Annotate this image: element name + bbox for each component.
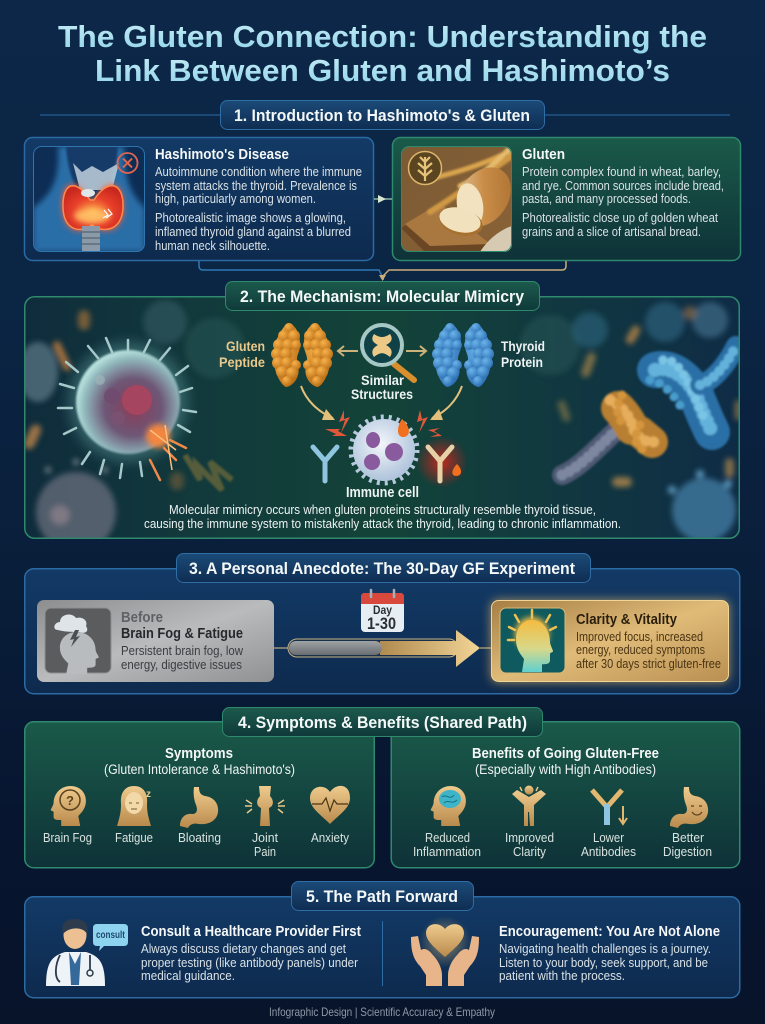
icon: thyroid protein molecule xyxy=(432,323,494,387)
panel: the path forward xyxy=(25,897,740,998)
benefit: lower antibodies xyxy=(581,790,636,859)
symptom: anxiety: Anxiety xyxy=(311,831,350,845)
text: symptoms heading: (Gluten Intolerance & Hashimoto's) xyxy=(104,762,295,777)
text: before description: Brain Fog & Fatigue xyxy=(121,626,243,642)
panel: benefits xyxy=(391,722,740,868)
text: encouragement xyxy=(499,924,720,983)
benefit: improved clarity: Improved xyxy=(505,831,554,845)
text: mimicry description xyxy=(144,502,621,531)
icon: inflamed antibody xyxy=(416,436,468,488)
heading: section 1 xyxy=(220,100,544,130)
benefit: reduced inflammation: Inflammation xyxy=(413,845,481,859)
heading: section 1: 1. Introduction to Hashimoto's & Gluten xyxy=(234,106,530,125)
benefit: reduced inflammation xyxy=(413,786,481,859)
icon: bright head xyxy=(500,608,565,673)
benefit: improved clarity: Clarity xyxy=(513,845,547,859)
text: symptoms heading xyxy=(104,746,295,777)
benefit: lower antibodies: Antibodies xyxy=(581,845,636,859)
text: gluten description: Photorealistic close up of golden wheat xyxy=(522,211,718,225)
text: consult provider: Consult a Healthcare Provider First xyxy=(141,924,361,940)
text: Hashimoto's description: Autoimmune condition where the immune xyxy=(155,165,362,179)
heading: section 2: 2. The Mechanism: Molecular Mimicry xyxy=(240,287,524,306)
label: thyroid protein: Thyroid xyxy=(501,338,545,354)
footer: Infographic Design | Scientific Accuracy & Empathy xyxy=(269,1005,495,1019)
symptom: fatigue: z xyxy=(146,789,151,800)
symptom: brain fog xyxy=(43,786,92,845)
symptom: anxiety xyxy=(310,786,350,845)
icon: immune cell xyxy=(351,417,417,483)
title: Link Between Gluten and Hashimoto’s xyxy=(95,53,670,88)
icon: doctor xyxy=(46,919,128,986)
text: clarity description xyxy=(576,612,721,671)
text: consult provider: medical guidance. xyxy=(141,969,235,983)
text: encouragement: patient with the process. xyxy=(499,969,625,983)
icon: hands holding heart xyxy=(411,916,479,986)
icon: wheat badge xyxy=(408,152,442,184)
benefit: reduced inflammation: Reduced xyxy=(425,831,470,845)
text: before description: Before xyxy=(121,610,163,626)
symptom: brain fog: ? xyxy=(66,793,74,808)
text: encouragement: Encouragement: You Are Not Alone xyxy=(499,924,720,940)
label: similar structures: Structures xyxy=(351,386,413,402)
panel: molecular mimicry xyxy=(18,296,741,552)
icon: warning cross xyxy=(118,153,138,173)
text: symptoms heading: Symptoms xyxy=(165,746,233,762)
text: Hashimoto's description: inflamed thyroid gland against a blurred xyxy=(155,225,351,239)
text: gluten description: Protein complex found in wheat, barley, xyxy=(522,165,721,179)
image: wheat and bread xyxy=(401,146,522,252)
symptom: brain fog: Brain Fog xyxy=(43,831,92,845)
text: clarity description: energy, reduced symptoms xyxy=(576,643,705,657)
label: similar structures: Similar xyxy=(361,372,404,388)
symptom: joint pain xyxy=(245,786,285,859)
heading: section 4 xyxy=(222,708,542,736)
heading: section 2 xyxy=(226,282,540,310)
text: gluten description xyxy=(522,147,724,239)
text: before description: energy, digestive issues xyxy=(121,658,242,672)
icon: gluten peptide molecule xyxy=(271,323,333,387)
image: inflamed thyroid xyxy=(33,146,145,252)
text: Hashimoto's description: Photorealistic image shows a glowing, xyxy=(155,211,346,225)
panel: Hashimoto's disease xyxy=(24,138,374,260)
icon: magnifying glass xyxy=(362,325,414,380)
text: benefits heading xyxy=(472,746,659,777)
heading: section 3 xyxy=(176,554,590,582)
arrows: similarity xyxy=(338,346,426,356)
text: clarity description: Clarity & Vitality xyxy=(576,612,677,628)
illustration: inflamed cell xyxy=(58,338,232,490)
text: before description: Persistent brain fog, low xyxy=(121,644,244,658)
label: thyroid protein: Protein xyxy=(501,354,543,370)
symptom: fatigue: Fatigue xyxy=(115,831,153,845)
text: gluten description: Gluten xyxy=(522,147,565,163)
text: Hashimoto's description: system attacks the thyroid. Prevalence is xyxy=(155,179,357,193)
callout: consult: consult xyxy=(96,929,125,941)
text: Hashimoto's description: Hashimoto's Disease xyxy=(155,147,289,163)
icon: sparks xyxy=(325,410,442,437)
label: gluten peptide: Gluten xyxy=(226,338,265,354)
arrow: intro flows into mechanism xyxy=(199,261,566,281)
arrows: to immune cell xyxy=(301,386,462,420)
text: consult provider: Always discuss dietary changes and get xyxy=(141,942,346,956)
panel: personal anecdote xyxy=(25,569,740,694)
heading: section 5 xyxy=(292,882,474,910)
benefit: improved clarity xyxy=(505,786,554,859)
text: Hashimoto's description xyxy=(155,147,362,253)
text: mimicry description: Molecular mimicry occurs when gluten proteins structurally resemble thyroid tissue, xyxy=(169,502,596,517)
label: gluten peptide: Peptide xyxy=(219,354,265,370)
arrow: link between intro panels xyxy=(374,195,392,203)
label: similar structures xyxy=(351,372,413,402)
benefit: better digestion: Better xyxy=(672,831,704,845)
text: benefits heading: Benefits of Going Gluten-Free xyxy=(472,746,659,762)
symptom: bloating: Bloating xyxy=(178,831,221,845)
icon: brain fog head xyxy=(45,608,111,674)
benefit: lower antibodies: Lower xyxy=(593,831,624,845)
panel: symptoms xyxy=(25,722,374,868)
arrow: progress xyxy=(274,630,491,667)
symptom: bloating xyxy=(178,787,221,845)
text: encouragement: Listen to your body, seek support, and be xyxy=(499,956,708,970)
text: Hashimoto's description: human neck silhouette. xyxy=(155,239,270,253)
text: before description xyxy=(121,610,244,672)
icon: calendar day 1-30: Day xyxy=(373,605,393,617)
heading: section 5: 5. The Path Forward xyxy=(306,887,458,906)
heading: section 3: 3. A Personal Anecdote: The 30-Day GF Experiment xyxy=(189,559,575,578)
symptom: joint pain: Joint xyxy=(252,831,279,845)
benefit: better digestion xyxy=(663,787,712,859)
label: thyroid protein xyxy=(501,338,545,370)
text: mimicry description: causing the immune system to mistakenly attack the thyroid, leading to chronic inflammation. xyxy=(144,516,621,531)
text: clarity description: after 30 days strict gluten-free xyxy=(576,657,721,671)
label: gluten peptide xyxy=(219,338,265,370)
text: consult provider: proper testing (like antibody panels) under xyxy=(141,956,358,970)
text: consult provider xyxy=(141,924,361,983)
text: benefits heading: (Especially with High Antibodies) xyxy=(475,762,656,777)
icon: blue antibody xyxy=(313,447,337,481)
title xyxy=(58,19,707,88)
text: Hashimoto's description: high, particularly among women. xyxy=(155,192,316,206)
icon: calendar day 1-30 xyxy=(361,590,404,633)
card: clarity and vitality xyxy=(491,600,729,682)
title: The Gluten Connection: Understanding the xyxy=(58,19,707,54)
card: before xyxy=(37,600,274,682)
text: gluten description: and rye. Common sources include bread, xyxy=(522,179,724,193)
label: immune cell: Immune cell xyxy=(346,485,419,501)
icon: calendar day 1-30: 1-30 xyxy=(367,614,396,633)
benefit: better digestion: Digestion xyxy=(663,845,712,859)
background: blurred cells and bacteria xyxy=(18,300,741,552)
panel: gluten xyxy=(392,138,740,260)
text: gluten description: pasta, and many processed foods. xyxy=(522,192,691,206)
illustration: bound proteins xyxy=(562,346,736,475)
symptom: fatigue xyxy=(115,786,153,845)
text: clarity description: Improved focus, increased xyxy=(576,630,703,644)
text: gluten description: grains and a slice of artisanal bread. xyxy=(522,225,701,239)
symptom: joint pain: Pain xyxy=(254,845,276,859)
text: encouragement: Navigating health challenges is a journey. xyxy=(499,942,711,956)
heading: section 4: 4. Symptoms & Benefits (Shared Path) xyxy=(238,713,527,732)
